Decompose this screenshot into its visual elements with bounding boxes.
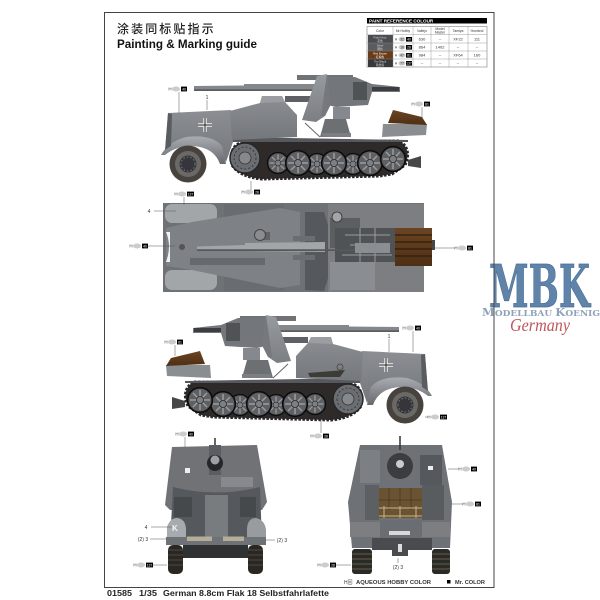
- callout labels: 137: [441, 415, 446, 419]
- legend: AQUEOUS HOBBY COLOR: [356, 580, 431, 586]
- paint reference table: 32: [400, 38, 404, 42]
- paint reference table: --: [439, 36, 442, 42]
- footer: product title: 1/35: [139, 588, 157, 598]
- paint reference table: Color: [376, 29, 385, 33]
- callout labels: 40: [472, 467, 476, 471]
- paint reference table: 40: [407, 38, 411, 42]
- paint reference table: 81: [407, 54, 411, 58]
- paint reference table: 137: [406, 62, 412, 66]
- paint reference table: --: [457, 44, 460, 50]
- callout labels: 81: [178, 340, 182, 344]
- callout labels: 40: [189, 432, 193, 436]
- callout labels: 40: [182, 87, 186, 91]
- callout labels: H: [241, 190, 245, 195]
- logo: MBK Modellbau Koenig Germany: Germany: [510, 315, 570, 335]
- callout labels: 28: [324, 434, 328, 438]
- callout labels: 28: [331, 563, 335, 567]
- paint reference table: 47: [400, 54, 404, 58]
- footer: product title: German 8.8cm Flak 18 Selbstfahrlafette: [163, 588, 329, 598]
- paint reference table: 1402: [436, 44, 445, 50]
- callout labels: H: [317, 563, 321, 568]
- callout labels: H: [454, 246, 458, 251]
- paint reference table: Mr.Hobby: [396, 29, 411, 33]
- leader lines: [143, 92, 463, 565]
- paint reference table: --: [476, 44, 479, 50]
- callout labels: 81: [425, 102, 429, 106]
- paint reference table: Master: [435, 30, 446, 34]
- decal numbers: 1: [206, 95, 209, 101]
- paint reference table: XF22: [453, 36, 464, 42]
- page frame: [104, 12, 494, 588]
- paint reference table: 160: [474, 52, 481, 58]
- paint reference table: Red Brown: [373, 52, 387, 56]
- callout labels: 137: [147, 563, 152, 567]
- vehicle: front view: K: [172, 524, 178, 533]
- callout labels: H: [458, 467, 462, 472]
- paint reference table: 984: [419, 52, 426, 58]
- paint reference table: Humbrol: [471, 29, 484, 33]
- paint reference table: 18: [400, 46, 404, 50]
- decal numbers: [138, 95, 403, 571]
- logo: MBK Modellbau Koenig Germany: MODELLBAU KOENIG: [482, 306, 600, 319]
- callout labels: H: [310, 434, 314, 439]
- legend: [344, 580, 485, 586]
- vehicle: rear view: [348, 436, 452, 574]
- paint reference table: Steel: [377, 44, 384, 48]
- paint reference table: 630: [419, 36, 426, 42]
- paint reference table: 红棕色: [376, 55, 384, 59]
- legend: H⊠: [344, 580, 353, 586]
- callout labels: H: [411, 102, 415, 107]
- heading: Chinese title: 涂装同标贴指示: [117, 21, 216, 36]
- legend: Mr. COLOR: [455, 580, 485, 586]
- callout labels: H: [129, 244, 133, 249]
- heading: Painting and Marking guide: Painting & Marking guide: [117, 37, 257, 51]
- callout labels: H: [402, 326, 406, 331]
- paint reference table: 钢色: [377, 47, 383, 51]
- callout labels: 81: [476, 502, 480, 506]
- callout labels: 28: [255, 190, 259, 194]
- callout labels: H: [427, 415, 431, 420]
- paint reference table: H: [395, 38, 398, 42]
- paint reference table: PAINT REFERENCE COLOUR: [369, 18, 434, 23]
- paint reference table: H: [395, 46, 398, 50]
- paint reference table: Model: [435, 27, 445, 31]
- paint reference table: H: [395, 62, 398, 66]
- vehicle: front view: [165, 438, 267, 574]
- decal numbers: (2) 3: [138, 537, 148, 543]
- decal numbers: 1: [388, 334, 391, 340]
- paint reference table: --: [421, 60, 424, 66]
- paint reference table: --: [476, 60, 479, 66]
- callout labels: H: [133, 563, 137, 568]
- callout labels: 81: [468, 246, 472, 250]
- paint reference table: XF64: [453, 52, 464, 58]
- paint reference table: 111: [474, 36, 481, 42]
- paint reference table: [367, 18, 487, 67]
- decal numbers: 4: [148, 209, 151, 215]
- decal numbers: (2) 3: [277, 538, 287, 544]
- paint reference table: 77: [400, 62, 404, 66]
- callout labels: 40: [416, 326, 420, 330]
- vehicle: side view facing left: [161, 74, 427, 182]
- paint reference table: --: [439, 52, 442, 58]
- vehicle: top view: [163, 203, 435, 292]
- footer: product title: 01585: [107, 588, 132, 598]
- paint reference table: 28: [407, 46, 411, 50]
- paint reference table: --: [439, 60, 442, 66]
- paint reference table: H: [395, 54, 398, 58]
- decal numbers: 4: [145, 525, 148, 531]
- paint reference table: Tamiya: [453, 29, 463, 33]
- callout labels: 137: [188, 192, 193, 196]
- callout labels: H: [164, 340, 168, 345]
- decal numbers: (2) 3: [393, 565, 403, 571]
- paint reference table: 灰色: [377, 39, 383, 43]
- paint reference table: 864: [419, 44, 426, 50]
- paint reference table: 轮胎黑: [376, 63, 384, 67]
- paint reference table: Vallejo: [417, 29, 427, 33]
- paint reference table: --: [457, 60, 460, 66]
- callout labels: H: [168, 87, 172, 92]
- callout labels: H: [174, 192, 178, 197]
- vehicle: side view facing right: [166, 315, 432, 424]
- callout labels: H: [462, 502, 466, 507]
- callout labels: [129, 86, 481, 568]
- paint reference table: Field Grey: [374, 36, 387, 40]
- paint reference table: Tire Black: [374, 60, 387, 64]
- callout labels: H: [175, 432, 179, 437]
- callout labels: 40: [143, 244, 147, 248]
